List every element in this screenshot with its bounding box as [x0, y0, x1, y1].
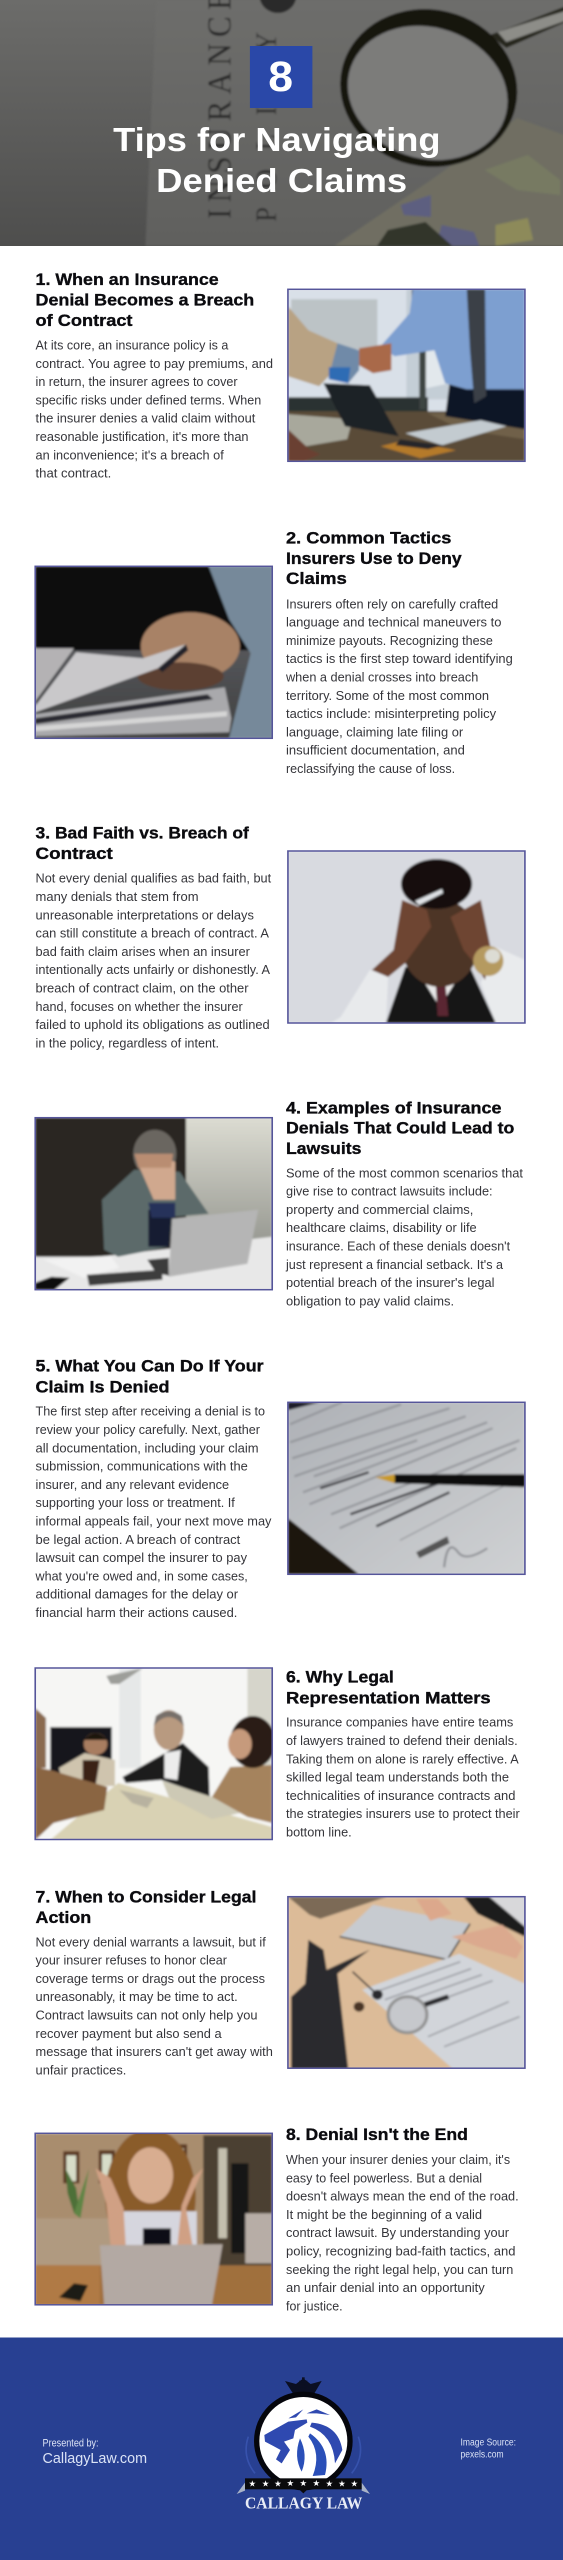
body text 5: [35, 1404, 272, 1620]
body text 3: failed to uphold its obligations as outlined: [36, 1018, 270, 1032]
body text 3: bad faith claim arises when an insurer: [36, 944, 251, 959]
body text 3: many denials that stem from: [36, 889, 199, 904]
body text 7: Not every denial warrants a lawsuit, but if: [36, 1935, 266, 1949]
body text 3: intentionally acts unfairly or dishonestly. A: [36, 963, 270, 977]
image source: [461, 2437, 516, 2460]
body text 8: easy to feel powerless. But a denial: [286, 2171, 482, 2185]
body text 2: insufficient documentation, and: [286, 743, 465, 758]
number badge: 8: [268, 53, 293, 101]
presented by: [43, 2438, 147, 2467]
image source: pexels.com: [461, 2449, 504, 2460]
body text 7: your insurer refuses to honor clear: [36, 1953, 228, 1967]
body text 4: healthcare claims, disability or life: [286, 1221, 477, 1235]
logo: Callagy Law lion crest: ★: [248, 2479, 256, 2489]
panel: section 6: [35, 1667, 520, 1840]
body text 5: be legal action. A breach of contract: [36, 1532, 241, 1547]
body text 3: [36, 871, 271, 1050]
body text 4: Some of the most common scenarios that: [286, 1166, 523, 1180]
body text 7: unfair practices.: [36, 2063, 126, 2077]
body text 2: minimize payouts. Recognizing these: [286, 633, 493, 648]
panel: section 3: [36, 823, 525, 1050]
body text 1: specific risks under defined terms. When: [36, 393, 261, 407]
body text 2: [285, 597, 513, 776]
body text 1: in return, the insurer agrees to cover: [36, 375, 238, 389]
body text 1: an inconvenience; it's a breach of: [36, 448, 224, 462]
photo: contract and pen: [288, 1402, 525, 1574]
photo: businessman with hands on face at laptop: [35, 1118, 272, 1290]
body text 6: the strategies insurers use to protect their: [286, 1807, 520, 1821]
body text 3: Not every denial qualifies as bad faith, but: [36, 871, 271, 886]
logo: Callagy Law lion crest: CALLAGY LAW: [245, 2493, 363, 2512]
body text 8: an unfair denial into an opportunity: [286, 2281, 485, 2295]
header background photo: POLICY: [251, 32, 283, 222]
logo: Callagy Law lion crest: ★: [350, 2479, 358, 2489]
body text 6: Taking them on alone is rarely effective. A: [286, 1752, 519, 1766]
photo: handshake over a desk: [288, 289, 525, 461]
body text 5: submission, communications with the: [36, 1459, 248, 1473]
body text 8: contract lawsuit. By understanding your: [286, 2226, 510, 2240]
logo: Callagy Law lion crest: ★: [338, 2478, 346, 2488]
heading 8: 8. Denial Isn't the End: [286, 2125, 468, 2144]
body text 8: It might be the beginning of a valid: [286, 2207, 482, 2222]
body text 6: Insurance companies have entire teams: [286, 1715, 514, 1730]
panel: section 8: [35, 2125, 519, 2313]
body text 5: supporting your loss or treatment. If: [36, 1496, 235, 1510]
body text 5: what you're owed and, in some cases,: [35, 1569, 248, 1583]
body text 5: insurer, and any relevant evidence: [36, 1477, 229, 1492]
body text 6: skilled legal team understands both the: [286, 1770, 509, 1784]
heading 3: Contract: [36, 844, 113, 863]
heading 6: [286, 1667, 491, 1707]
heading 1: 1. When an Insurance: [36, 270, 219, 289]
heading 2: Claims: [286, 569, 347, 588]
body text 6: [286, 1715, 520, 1839]
heading 5: Claim Is Denied: [36, 1377, 169, 1396]
body text 7: message that insurers can't get away with: [36, 2045, 273, 2059]
body text 3: unreasonable interpretations or delays: [36, 908, 254, 922]
body text 7: Contract lawsuits can not only help you: [36, 2008, 257, 2022]
body text 5: financial harm their actions caused.: [36, 1605, 237, 1620]
body text 2: reclassifying the cause of loss.: [286, 761, 455, 776]
title: Denied Claims: [156, 163, 407, 200]
footer band: [0, 2338, 563, 2560]
body text 2: tactics is the first step toward identifying: [286, 652, 513, 666]
body text 8: [286, 2152, 519, 2313]
presented by: Presented by:: [43, 2438, 99, 2450]
heading 3: [36, 823, 249, 863]
heading 1: Denial Becomes a Breach: [36, 290, 254, 309]
heading 5: 5. What You Can Do If Your: [36, 1356, 264, 1376]
heading 4: [286, 1098, 515, 1158]
body text 7: [36, 1935, 273, 2077]
body text 8: doesn't always mean the end of the road.: [286, 2189, 519, 2203]
body text 5: all documentation, including your claim: [36, 1441, 259, 1455]
logo: Callagy Law lion crest: ★: [299, 2478, 307, 2488]
body text 1: reasonable justification, it's more than: [36, 429, 249, 444]
heading 2: 2. Common Tactics: [286, 528, 452, 547]
presented by: CallagyLaw.com: [43, 2450, 147, 2467]
body text 4: property and commercial claims,: [286, 1202, 473, 1217]
body text 5: informal appeals fail, your next move may: [36, 1514, 272, 1528]
body text 2: language and technical maneuvers to: [286, 615, 501, 629]
heading 6: 6. Why Legal: [286, 1667, 394, 1687]
body text 1: [36, 338, 273, 480]
heading 5: [36, 1356, 264, 1396]
body text 2: tactics include: misinterpreting policy: [286, 707, 497, 721]
heading 7: Action: [36, 1908, 91, 1927]
panel: section 5: [35, 1356, 525, 1620]
photo: scales of justice statue and documents: [288, 1897, 525, 2069]
body text 7: coverage terms or drags out the process: [36, 1971, 265, 1986]
body text 4: insurance. Each of these denials doesn't: [286, 1239, 510, 1253]
body text 3: in the policy, regardless of intent.: [36, 1036, 219, 1050]
body text 3: hand, focuses on whether the insurer: [36, 999, 243, 1014]
photo: stressed man holding head: [288, 851, 525, 1023]
photo: legal team meeting at table: [35, 1668, 275, 1840]
body text 8: When your insurer denies your claim, it's: [286, 2152, 510, 2167]
body text 2: Insurers often rely on carefully crafted: [286, 597, 498, 611]
title: Tips for Navigating: [113, 122, 441, 159]
body text 6: technicalities of insurance contracts and: [286, 1788, 515, 1803]
body text 6: bottom line.: [286, 1825, 352, 1839]
panel: section 1: [36, 270, 525, 480]
panel: section 4: [35, 1098, 523, 1308]
heading 2: [286, 528, 462, 588]
body text 6: of lawyers trained to defend their denials.: [286, 1733, 518, 1748]
body text 8: for justice.: [286, 2299, 343, 2313]
body text 7: recover payment but also send a: [36, 2026, 222, 2041]
title: [113, 122, 441, 200]
heading 7: 7. When to Consider Legal: [36, 1887, 256, 1906]
body text 5: lawsuit can compel the insurer to pay: [36, 1551, 247, 1565]
number badge: [250, 46, 312, 108]
body text 4: [285, 1166, 523, 1308]
heading 4: Lawsuits: [286, 1139, 362, 1158]
header banner: [0, 0, 563, 246]
body text 1: At its core, an insurance policy is a: [36, 338, 229, 352]
body text 7: unreasonably, it may be time to act.: [36, 1990, 238, 2004]
body text 5: The first step after receiving a denial is to: [36, 1404, 265, 1419]
body text 2: language, claiming late filing or: [286, 725, 464, 739]
body text 4: obligation to pay valid claims.: [286, 1294, 454, 1308]
image source: Image Source:: [461, 2437, 516, 2449]
body text 5: review your policy carefully. Next, gather: [36, 1422, 261, 1437]
logo: Callagy Law lion crest: ★: [286, 2478, 294, 2488]
heading 2: Insurers Use to Deny: [286, 549, 462, 568]
body text 5: additional damages for the delay or: [36, 1587, 239, 1602]
panel: section 2: [35, 528, 513, 776]
body text 3: can still constitute a breach of contract. A: [36, 926, 269, 940]
photo: hand on stack of papers: [35, 566, 272, 738]
body text 4: give rise to contract lawsuits include:: [286, 1184, 493, 1198]
body text 2: territory. Some of the most common: [286, 688, 489, 703]
heading 1: of Contract: [36, 311, 133, 330]
heading 1: [36, 270, 254, 330]
body text 2: when a denial crosses into breach: [285, 670, 478, 684]
heading 4: Denials That Could Lead to: [286, 1118, 515, 1137]
photo: frustrated woman at laptop: [35, 2128, 272, 2305]
body text 4: potential breach of the insurer's legal: [286, 1276, 495, 1290]
logo: Callagy Law lion crest: [237, 2377, 370, 2512]
logo: Callagy Law lion crest: ★: [312, 2478, 320, 2488]
heading 3: 3. Bad Faith vs. Breach of: [36, 823, 249, 842]
heading 6: Representation Matters: [286, 1688, 491, 1707]
body text 3: breach of contract claim, on the other: [36, 981, 249, 995]
body text 8: policy, recognizing bad-faith tactics, and: [286, 2244, 515, 2258]
logo: Callagy Law lion crest: ★: [274, 2478, 282, 2488]
body text 4: just represent a financial setback. It's a: [285, 1257, 504, 1272]
body text 1: the insurer denies a valid claim without: [36, 411, 256, 426]
logo: Callagy Law lion crest: ★: [325, 2478, 333, 2488]
header background photo: [0, 0, 563, 246]
body text 1: contract. You agree to pay premiums, and: [36, 356, 273, 371]
heading 4: 4. Examples of Insurance: [286, 1098, 502, 1117]
panel: section 7: [36, 1887, 525, 2077]
body text 8: seeking the right legal help, you can turn: [286, 2262, 513, 2277]
heading 7: [36, 1887, 256, 1927]
body text 1: that contract.: [36, 466, 111, 480]
logo: Callagy Law lion crest: ★: [262, 2478, 270, 2488]
